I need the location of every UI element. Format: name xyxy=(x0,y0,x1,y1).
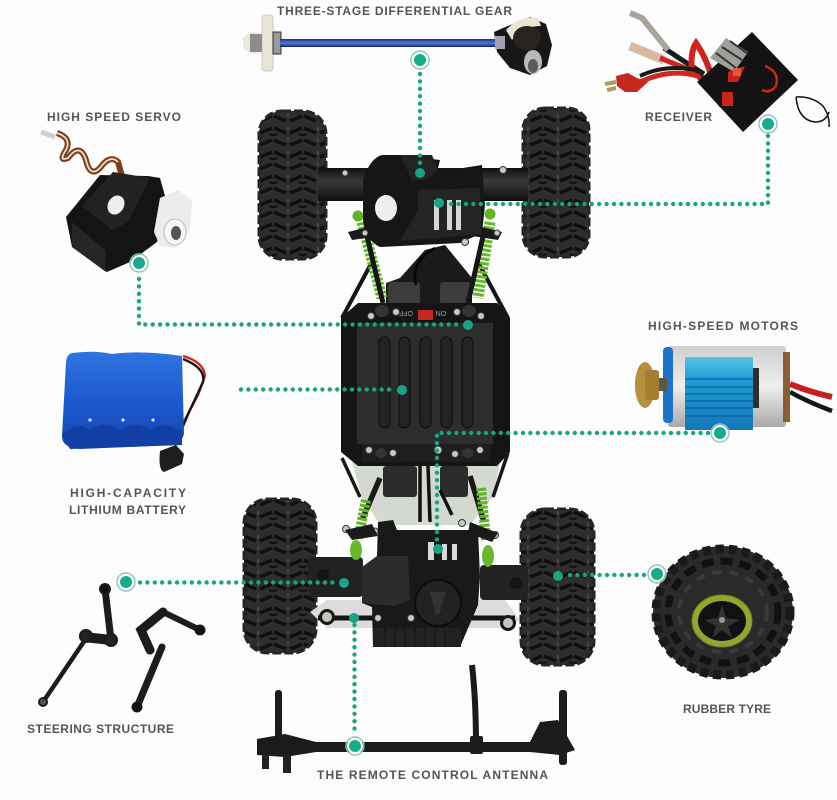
part: receiver xyxy=(605,13,829,132)
connector: receiver xyxy=(434,115,777,208)
label: high-capacity lithium battery: LITHIUM BATTERY xyxy=(69,503,186,517)
front right tyre xyxy=(523,108,589,257)
connector: differential gear xyxy=(411,51,429,178)
connector: battery xyxy=(241,385,407,395)
connector: steering structure xyxy=(117,573,349,591)
rear right tyre xyxy=(521,509,594,665)
battery cover xyxy=(341,303,510,466)
battery cover: OFF xyxy=(399,309,413,316)
part: steering structure xyxy=(39,584,205,712)
label: high-capacity lithium battery: HIGH-CAPACITY xyxy=(70,486,186,500)
part: high speed motor xyxy=(635,346,832,430)
label: the remote control antenna: THE REMOTE CONTROL ANTENNA xyxy=(317,768,548,782)
label: high-capacity lithium battery xyxy=(69,486,186,517)
label: receiver: RECEIVER xyxy=(645,110,712,124)
part: remote control antenna xyxy=(257,665,575,773)
battery cover: ON xyxy=(436,309,446,316)
connector: high speed motor xyxy=(433,424,729,554)
label: high speed servo: HIGH SPEED SERVO xyxy=(47,110,181,124)
connector: rubber tyre xyxy=(553,565,666,583)
connector: remote control antenna xyxy=(346,613,364,755)
label: rubber tyre: RUBBER TYRE xyxy=(683,702,771,716)
front axle and housing xyxy=(318,155,528,247)
rear left tyre xyxy=(244,499,316,653)
part: battery pack xyxy=(62,352,205,472)
part: rubber tyre xyxy=(653,546,793,678)
chassis and suspension xyxy=(342,208,508,540)
connector: high speed servo xyxy=(130,254,473,330)
label: high-speed motors: HIGH-SPEED MOTORS xyxy=(648,319,798,333)
front left tyre xyxy=(259,111,326,259)
label: three-stage differential gear: THREE-STAGE DIFFERENTIAL GEAR xyxy=(277,4,512,18)
part: differential gear axle xyxy=(243,15,552,75)
part: high speed servo xyxy=(41,132,192,272)
label: steering structure: STEERING STRUCTURE xyxy=(27,722,174,736)
rear axle and gearbox xyxy=(308,520,528,647)
